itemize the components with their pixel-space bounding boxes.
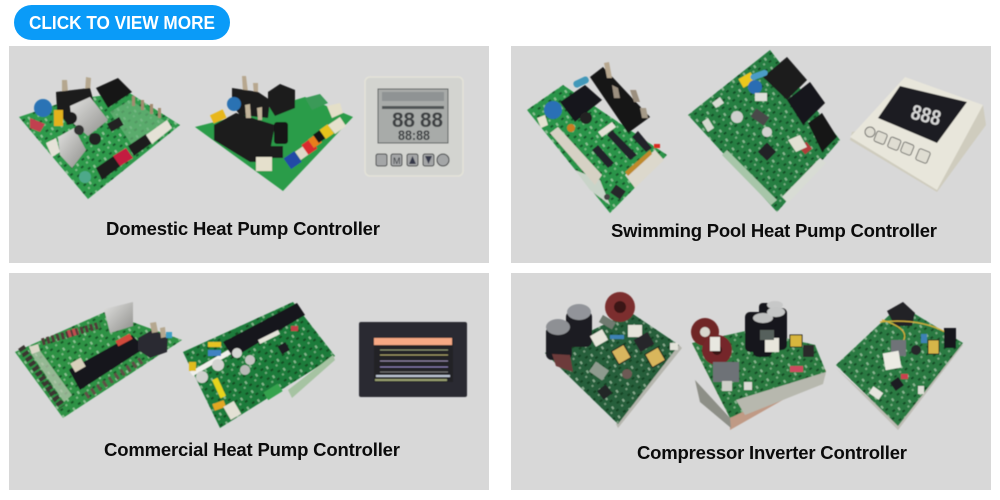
panel: domestic heat pump controller bbox=[9, 46, 489, 263]
icon: touch screen bbox=[359, 322, 467, 397]
board: inverter 3 bbox=[836, 302, 963, 430]
title: domestic: Domestic Heat Pump Controller bbox=[106, 218, 380, 239]
icon: LCD thermostat panel: M bbox=[393, 156, 400, 166]
icon: LCD thermostat panel bbox=[365, 77, 463, 176]
title: commercial: Commercial Heat Pump Controller bbox=[104, 439, 400, 460]
title: pool: Swimming Pool Heat Pump Controller bbox=[611, 220, 937, 241]
icon: LCD thermostat panel: 88 bbox=[420, 109, 443, 132]
button: click to view more bbox=[14, 5, 230, 40]
panel: commercial heat pump controller bbox=[9, 273, 489, 490]
title: compressor: Compressor Inverter Controller bbox=[637, 442, 907, 463]
panel: compressor inverter controller bbox=[511, 273, 991, 490]
board: inverter 1 bbox=[545, 292, 682, 428]
board: commercial controller 2 bbox=[183, 302, 335, 428]
board: commercial controller 1 bbox=[15, 302, 182, 418]
board: domestic controller 1 bbox=[19, 77, 180, 199]
board: pool controller 2 bbox=[688, 50, 840, 212]
icon: LCD thermostat panel: 88:88 bbox=[398, 127, 430, 143]
icon: LCD thermostat panel: 88 bbox=[392, 109, 415, 132]
icon: pool control panel bbox=[850, 77, 986, 192]
panel: swimming pool heat pump controller bbox=[511, 46, 991, 263]
button: click to view more: CLICK TO VIEW MORE bbox=[29, 12, 215, 33]
board: domestic controller 2 bbox=[195, 76, 353, 191]
board: pool controller 1 bbox=[527, 62, 667, 213]
icon: pool control panel: 888 bbox=[909, 101, 943, 131]
board: inverter 2 bbox=[691, 301, 826, 430]
